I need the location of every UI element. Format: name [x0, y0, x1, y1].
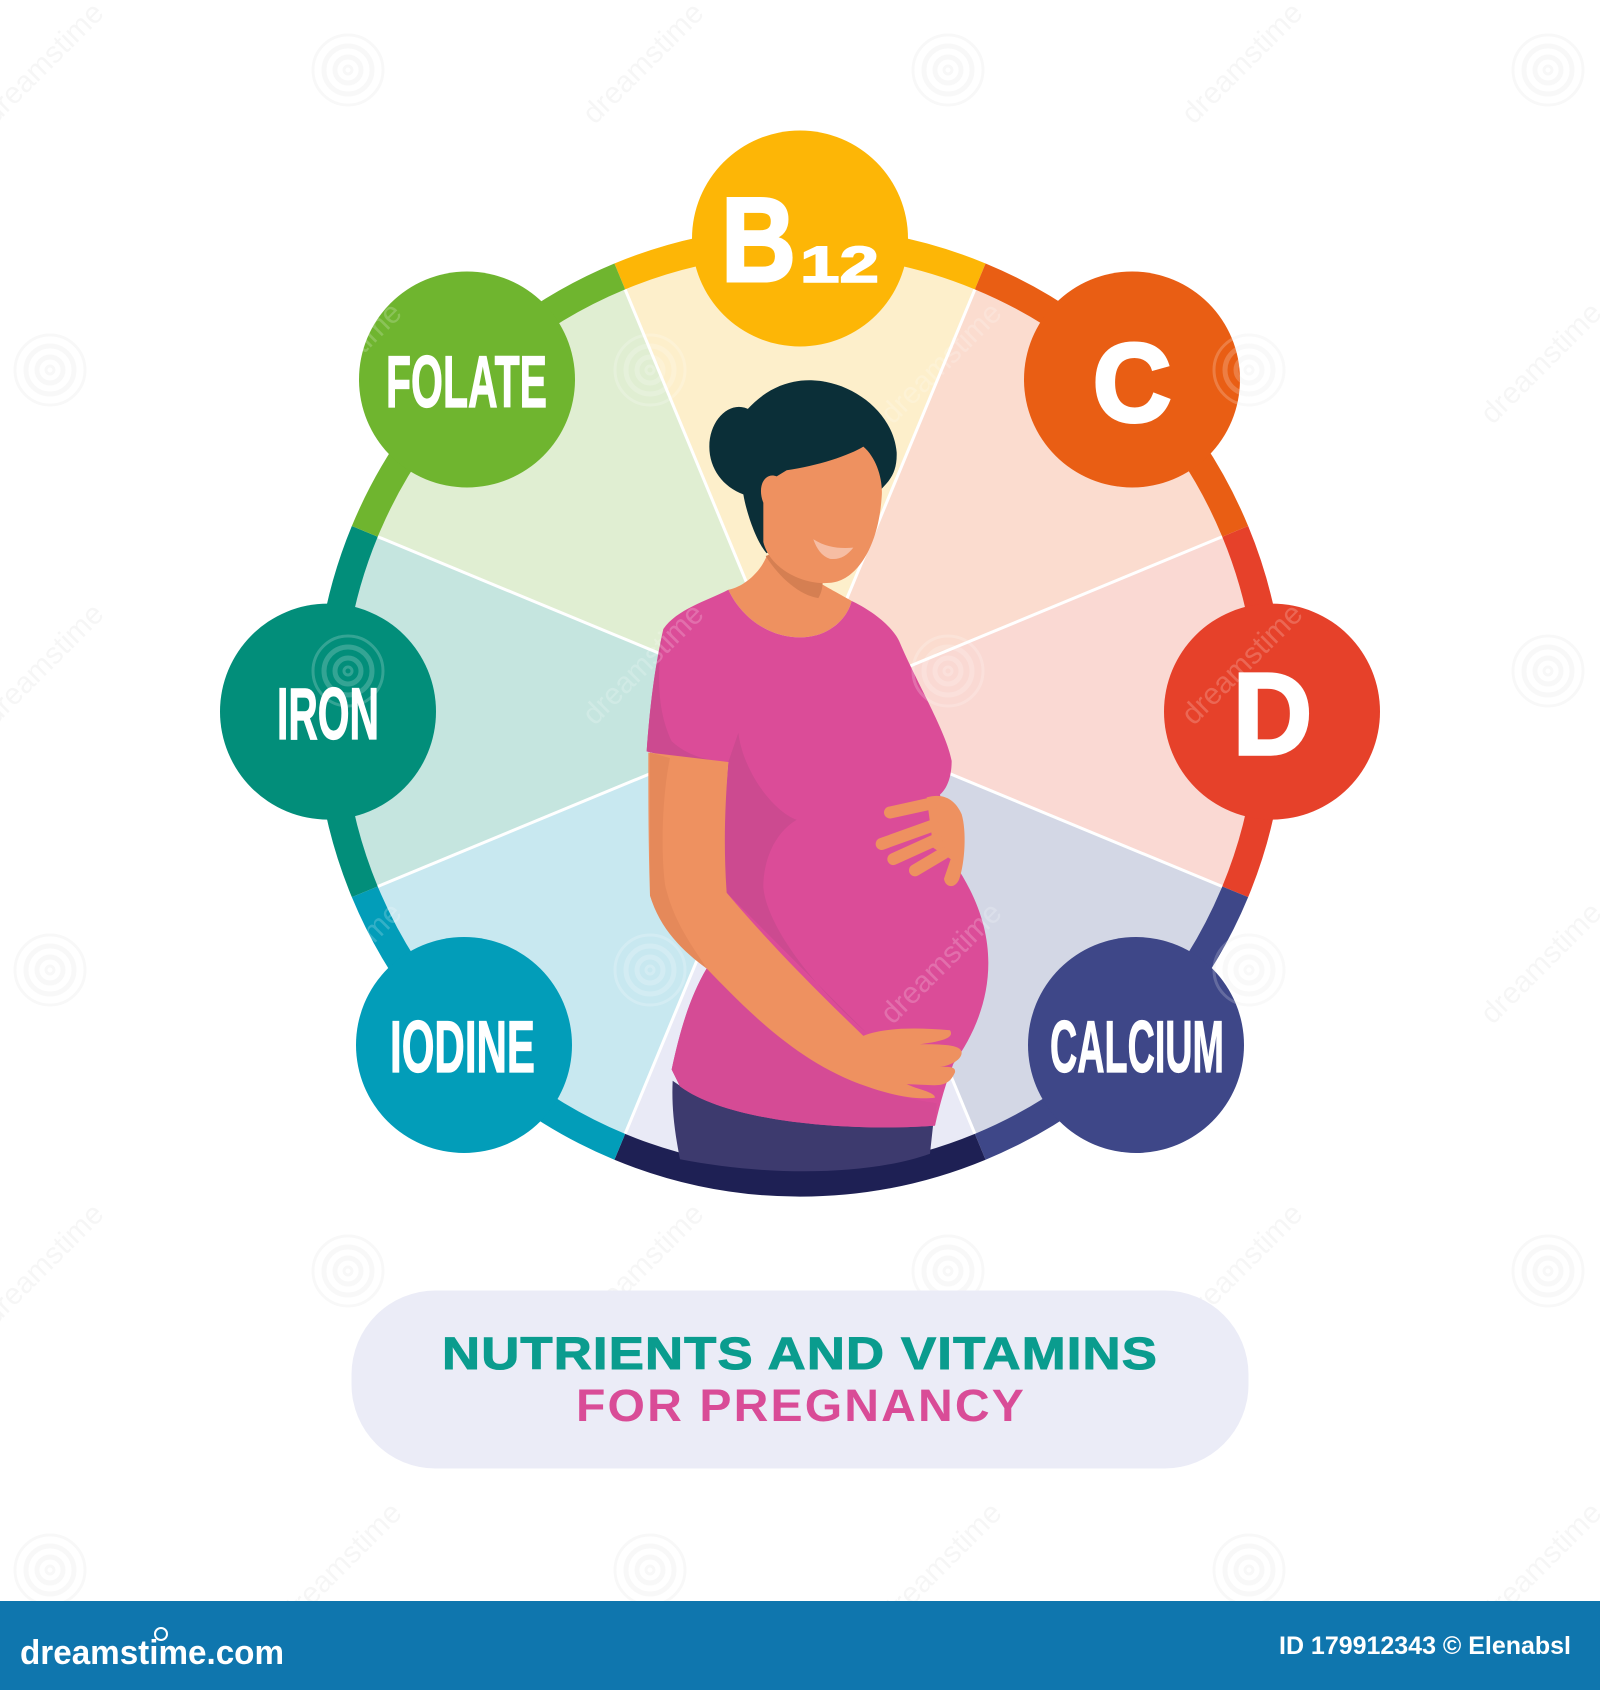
hair: [709, 380, 897, 553]
text: dreamstime: [874, 896, 1008, 1030]
text: dreamstime: [1175, 597, 1309, 731]
neck and chest: [728, 556, 852, 637]
badge: iron: [220, 604, 436, 820]
badge: B12: B: [721, 173, 796, 307]
badge: D: [1164, 604, 1380, 820]
shirt: [647, 590, 988, 1127]
badge: C: C: [1093, 322, 1171, 445]
text: dreamstime: [576, 1197, 710, 1331]
title line 2: FOR PREGNANCY: [576, 1380, 1026, 1431]
text: dreamstime: [274, 1496, 408, 1630]
badge: folate: [359, 272, 575, 488]
badge: C: [1024, 272, 1240, 488]
footer image id: ID 179912343 © Elenabsl: [1279, 1632, 1571, 1660]
text: dreamstime: [274, 296, 408, 430]
pregnant woman illustration: [647, 380, 988, 1171]
badge: iron: IRON: [277, 674, 379, 755]
text: dreamstime: [874, 1496, 1008, 1630]
footer logo: dreamstime.com: [20, 1634, 284, 1672]
title pill: [352, 1290, 1248, 1468]
text: dreamstime: [1175, 1197, 1309, 1331]
arm: [648, 752, 962, 1098]
shirt lower shading: [672, 969, 937, 1127]
badge: B12: [692, 130, 908, 346]
text: dreamstime: [1175, 0, 1309, 130]
pants: [672, 1081, 933, 1171]
footer bar: [0, 1601, 1600, 1690]
text: dreamstime: [874, 296, 1008, 430]
neck shadow: [766, 553, 823, 598]
badge: calcium: [1028, 937, 1244, 1153]
wheel coloured ring: [329, 241, 1271, 1183]
text: dreamstime: [576, 0, 710, 130]
smile: [813, 539, 853, 559]
badge: folate: FOLATE: [386, 342, 547, 423]
badge: calcium: CALCIUM: [1050, 1007, 1224, 1088]
nutrient wheel: [220, 130, 1380, 1197]
badge: iodine: [356, 937, 572, 1153]
face: [761, 447, 882, 583]
arm shadow: [650, 752, 707, 969]
badge: B12: 12: [800, 236, 879, 293]
title line 1: NUTRIENTS AND VITAMINS: [442, 1328, 1158, 1379]
badge: D: D: [1233, 649, 1312, 779]
badge: iodine: IODINE: [390, 1007, 535, 1088]
shirt shading: [647, 632, 867, 1033]
upper hand: [882, 796, 965, 886]
text: dreamstime: [274, 896, 408, 1030]
text: dreamstime: [576, 597, 710, 731]
wheel pale sectors: [315, 227, 1285, 1197]
